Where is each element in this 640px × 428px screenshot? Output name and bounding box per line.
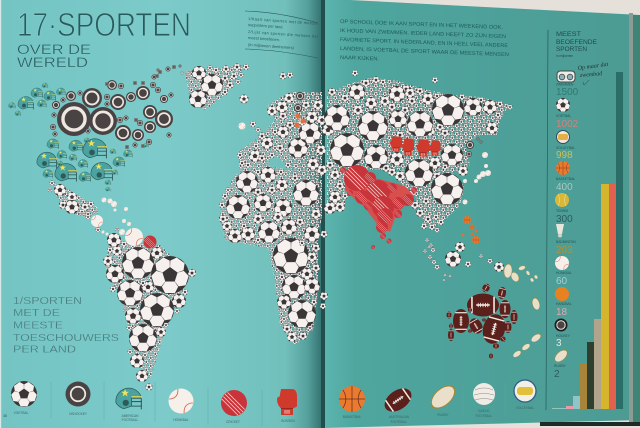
map: Philippines basketball — [462, 216, 480, 244]
legend item: american football: AMERICAN — [122, 414, 139, 418]
legend item: volleybal — [514, 380, 536, 410]
title: WERELD — [17, 54, 88, 70]
list item: tennis: 300 — [556, 214, 573, 225]
list item: basketbal: 400 — [556, 182, 573, 193]
list item: badminton: 203 — [556, 245, 573, 256]
bar chart: participants per sport — [552, 72, 623, 409]
notes box: (in miljoenen deelnemers) — [248, 42, 295, 50]
heading: sporten met de meeste toeschouwers — [13, 295, 119, 356]
list item: hockey: 3 — [556, 338, 562, 349]
legend item: rugby — [427, 382, 459, 417]
map: Africa — [219, 167, 328, 342]
notes box — [245, 11, 319, 58]
list item: voetbal: VOETBAL — [556, 114, 571, 118]
panel heading: MEEST — [556, 32, 581, 38]
legend item: cricket — [221, 390, 247, 424]
title: OVER DE — [17, 41, 91, 57]
legend item: australian football: AUSTRALIAN — [389, 415, 410, 419]
legend item: gaelic football — [473, 383, 495, 418]
notes box: meest beoefenen. — [248, 35, 280, 42]
handwritten note: zwembad — [579, 71, 603, 79]
notes box: 1/Kaart van sporten met de meeste — [248, 16, 319, 26]
heading: sporten met de meeste toeschouwers: MEESTE — [13, 320, 63, 332]
list item: zwemmen: ZWEMMEN — [556, 82, 574, 86]
list item: zwemmen — [556, 71, 579, 98]
list: sports with participant numbers — [553, 71, 579, 380]
legend item: basketbal — [339, 386, 365, 419]
map: Europe — [237, 92, 327, 175]
list item: honkbal — [555, 256, 572, 287]
map: South America football — [103, 227, 196, 390]
list item: hockey — [554, 318, 571, 349]
legend item: cricket: CRICKET — [226, 420, 240, 424]
intro paragraph: FAVORIETE SPORT. IN NEDERLAND, EN IN HEEL VEEL ANDERE — [340, 37, 509, 49]
heading: sporten met de meeste toeschouwers: MET DE — [13, 307, 60, 319]
title: 17·SPORTEN — [17, 6, 191, 43]
list item: honkbal: 60 — [556, 276, 568, 287]
list item: badminton — [556, 224, 576, 256]
map: Greenland and Iceland — [180, 63, 293, 108]
legend item: ijshockey — [66, 382, 90, 416]
legend item: gaelic football: FOOTBALL — [476, 414, 493, 418]
intro paragraph: IK HOUD VAN ZWEMMEN. IEDER LAND HEEFT ZO ZIJN EIGEN — [340, 28, 506, 40]
panel heading: SPORTEN — [556, 47, 587, 53]
list item: tennis — [555, 193, 573, 225]
map: Canada ice hockey — [50, 64, 182, 149]
list item: rugby: RUGBY — [554, 364, 567, 368]
legend: sports per country — [11, 380, 536, 426]
legend item: australian football: FOOTBALL — [391, 420, 408, 424]
list item: volleybal: VOLLEYBAL — [556, 146, 575, 150]
notes box: 2/Lijst van sporten die mensen het — [248, 29, 319, 39]
intro paragraph — [340, 19, 509, 62]
map: Pacific rugby — [503, 264, 542, 359]
list item: handbal: 18 — [556, 307, 568, 318]
panel heading: in miljoenen — [556, 54, 573, 58]
map: continent fill of small footballs — [52, 65, 510, 380]
list item: honkbal: HONKBAL — [556, 271, 572, 275]
intro paragraph: NAAR KIJKEN. — [340, 55, 379, 62]
list item: rugby — [553, 348, 569, 380]
world map of sports — [8, 63, 542, 390]
list item: voetbal: 1002 — [556, 119, 579, 130]
panel: meest beoefende sporten — [546, 30, 623, 410]
legend item: ijshockey: IJSHOCKEY — [69, 412, 88, 416]
map: Japan baseball — [462, 152, 491, 204]
legend item: american football: FOOTBALL — [122, 418, 139, 422]
list item: tennis: TENNIS — [556, 209, 569, 213]
handwritten note: Op maar dat — [577, 62, 609, 72]
list item: volleybal: 998 — [556, 150, 573, 161]
legend item: voetbal: VOETBAL — [14, 411, 29, 415]
list item: handbal: HANDBAL — [556, 302, 572, 306]
list item: rugby: 2 — [554, 369, 560, 380]
list item: badminton: BADMINTON — [556, 240, 576, 244]
handwritten note — [577, 62, 609, 85]
intro paragraph: OP SCHOOL DOE IK AAN SPORT EN IN HET WEEKEND OOK. — [340, 19, 503, 31]
legend item: australian football — [380, 384, 416, 424]
heading: sporten met de meeste toeschouwers: 1/SPORTEN — [13, 295, 82, 307]
map: Central America and Caribbean — [48, 180, 131, 236]
map: central Asia boxing gloves — [390, 136, 440, 156]
legend item: honkbal — [168, 388, 194, 422]
panel heading — [556, 32, 597, 58]
legend item: rugby: RUGBY — [437, 413, 450, 417]
legend item: boksen — [277, 389, 297, 423]
page number: 38 — [3, 414, 7, 418]
legend item: honkbal: HONKBAL — [173, 418, 189, 422]
panel heading: BEOEFENDE — [556, 40, 597, 46]
map: India cricket — [340, 165, 417, 249]
intro paragraph: LANDEN, IS VOETBAL DE SPORT WAAR DE MEESTE MENSEN — [340, 46, 509, 58]
list item: handbal — [555, 287, 572, 318]
legend item: volleybal: VOLLEYBAL — [516, 406, 534, 410]
legend item: boksen: BOKSEN — [281, 419, 295, 423]
list item: hockey: HOCKEY — [556, 334, 571, 338]
list item: basketbal — [556, 161, 575, 193]
heading: sporten met de meeste toeschouwers: TOESCHOUWERS — [13, 332, 119, 344]
legend item: basketbal: BASKETBAL — [343, 415, 362, 419]
title — [17, 6, 191, 70]
legend item: gaelic football: GAELIC — [478, 409, 491, 413]
list item: basketbal: BASKETBAL — [556, 177, 575, 181]
list item: volleybal — [556, 130, 575, 161]
heading: sporten met de meeste toeschouwers: PER LAND — [13, 344, 77, 356]
legend item: american football — [116, 388, 142, 422]
list item: zwemmen: 1500 — [556, 87, 579, 98]
map: Australia football — [446, 282, 518, 359]
notes box: supporters per land. — [248, 22, 284, 29]
list item: voetbal — [556, 98, 579, 130]
map: Russia and Asia football — [322, 70, 513, 281]
legend item: voetbal — [11, 381, 37, 415]
map: USA and Alaska american football — [8, 83, 149, 191]
